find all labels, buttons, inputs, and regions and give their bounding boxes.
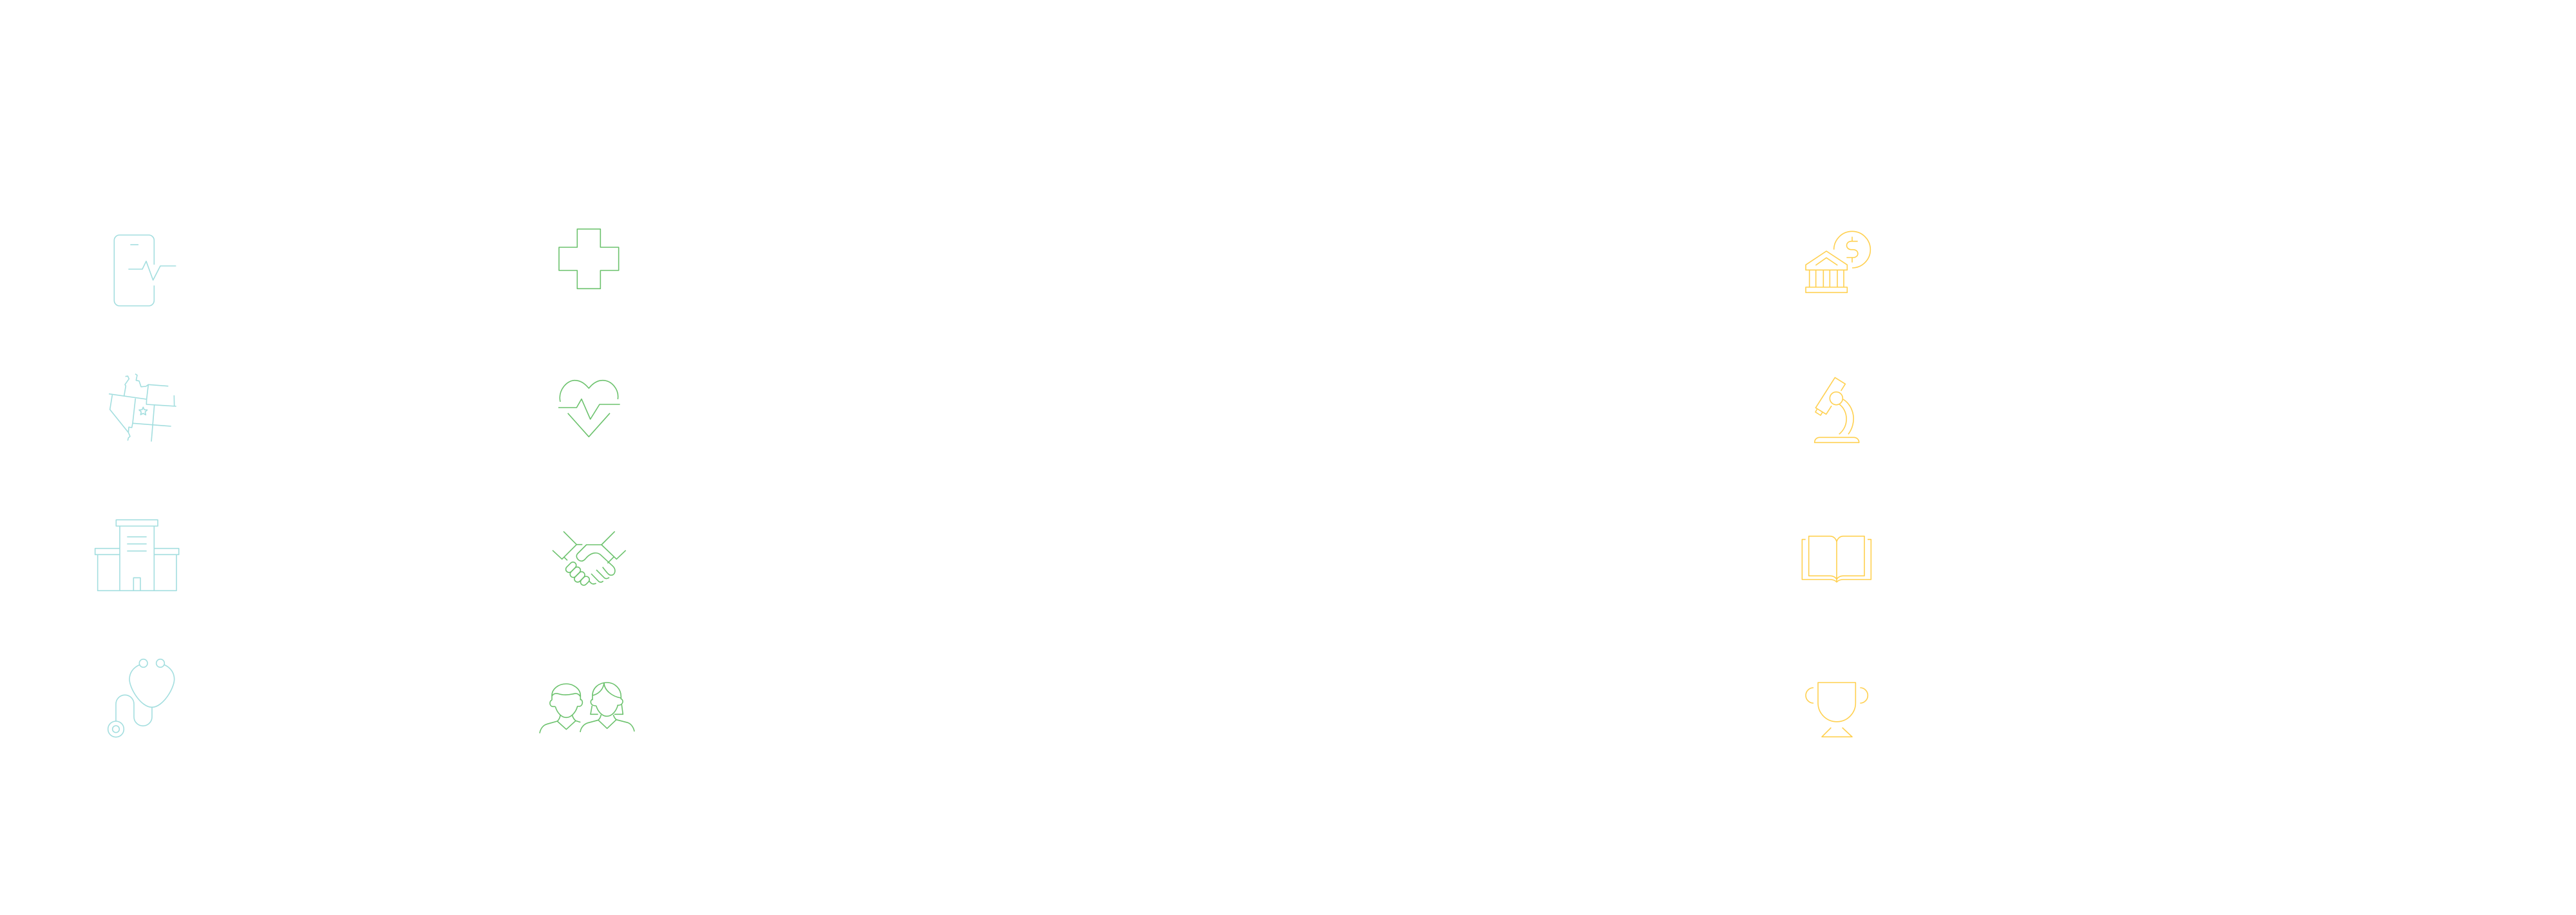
icon: man and woman bbox=[540, 683, 634, 733]
icon: trophy bbox=[1806, 683, 1868, 737]
icon: regional map with star bbox=[109, 374, 176, 442]
icon: microscope bbox=[1815, 377, 1859, 442]
icon: handshake bbox=[553, 531, 626, 587]
icon: hospital building bbox=[95, 520, 179, 590]
icon: heart with pulse bbox=[558, 381, 620, 437]
icon: open book bbox=[1802, 536, 1871, 582]
icon: bank with dollar coin bbox=[1806, 231, 1870, 292]
icon: smartphone with pulse bbox=[114, 235, 176, 306]
icon: medical cross bbox=[559, 229, 619, 288]
icon: stethoscope bbox=[108, 659, 175, 737]
